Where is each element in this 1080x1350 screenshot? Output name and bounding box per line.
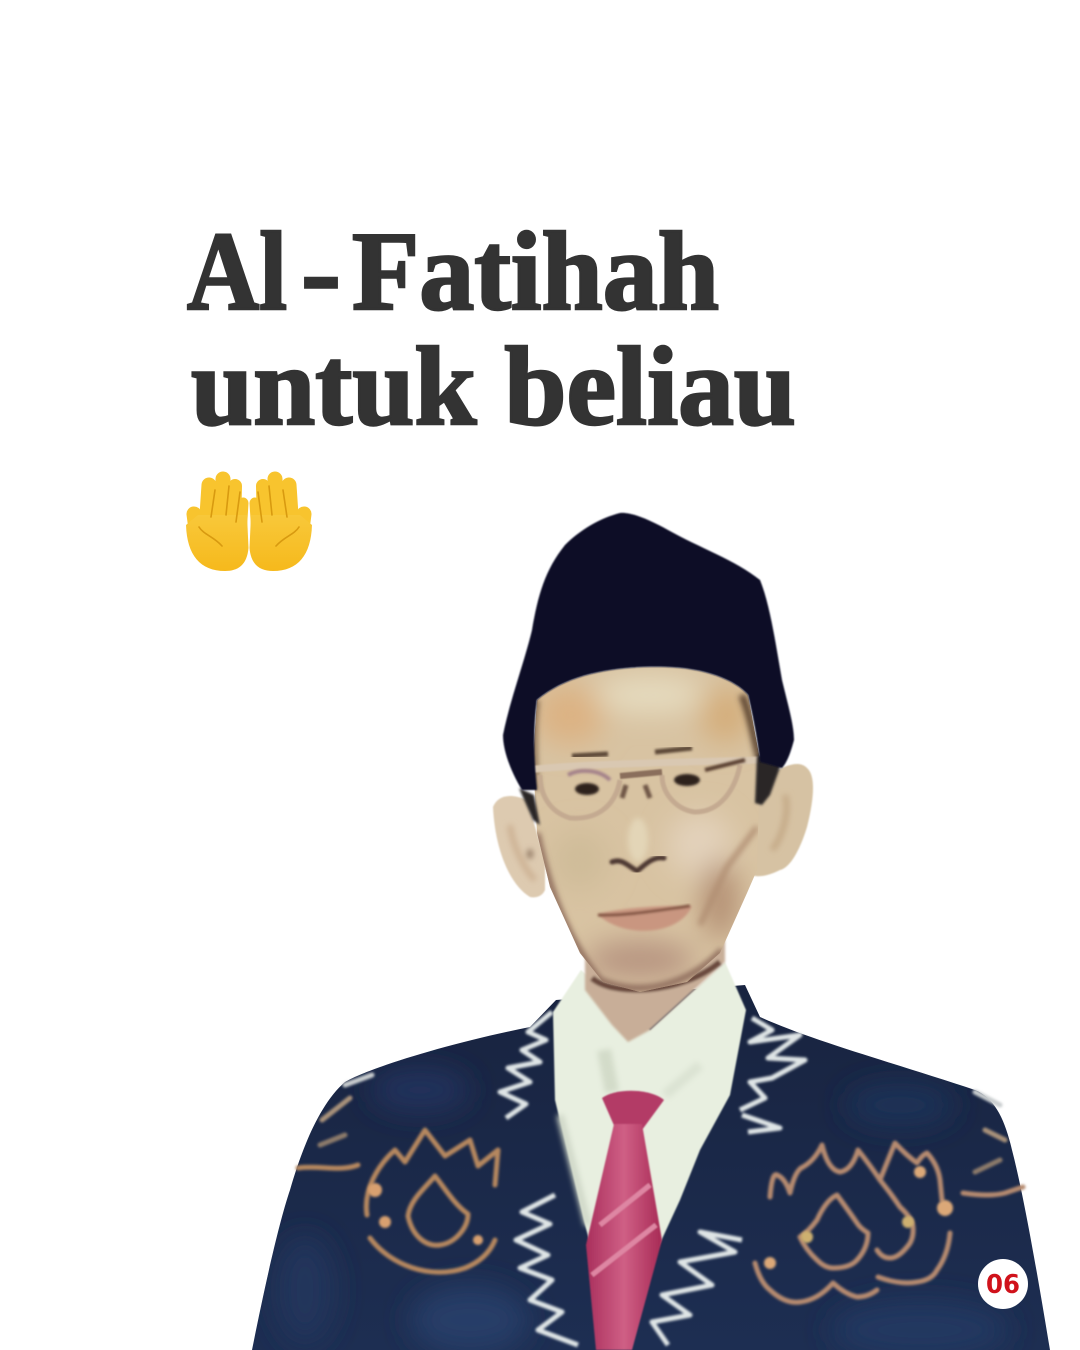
face	[534, 666, 760, 992]
title: Al	[187, 210, 287, 334]
lapel right white embroidery	[652, 1018, 805, 1345]
title: Fatihah	[352, 210, 719, 334]
shoulder pattern details	[320, 1075, 1005, 1172]
ear shading	[510, 795, 787, 880]
eyebrows	[572, 748, 692, 756]
right batik motif	[755, 1143, 1023, 1302]
eyes	[568, 760, 745, 798]
left ear	[493, 796, 545, 897]
jacket	[240, 980, 1070, 1350]
eyeglasses	[527, 760, 760, 818]
title: untuk beliau	[191, 325, 796, 449]
right batik accents	[764, 1166, 953, 1269]
necktie	[586, 1091, 664, 1350]
mouth	[597, 906, 692, 931]
left batik accents	[368, 1183, 483, 1245]
lapel left white embroidery	[500, 1012, 578, 1345]
black peci cap	[503, 513, 794, 790]
title: -	[301, 210, 341, 334]
icon: open palms emoji	[186, 479, 312, 571]
page number badge: 06	[986, 1270, 1020, 1300]
page number badge	[978, 1259, 1028, 1309]
glasses temple and sideburns	[519, 755, 782, 825]
right ear	[750, 764, 813, 876]
neck	[585, 940, 725, 1042]
left batik motif	[298, 1130, 498, 1272]
portrait photo of man	[240, 513, 1070, 1350]
shirt collar and front	[553, 962, 746, 1280]
title	[187, 210, 796, 449]
infographic canvas	[186, 230, 1050, 1350]
nose	[612, 858, 664, 871]
shirt shadow under collar	[560, 1050, 700, 1225]
